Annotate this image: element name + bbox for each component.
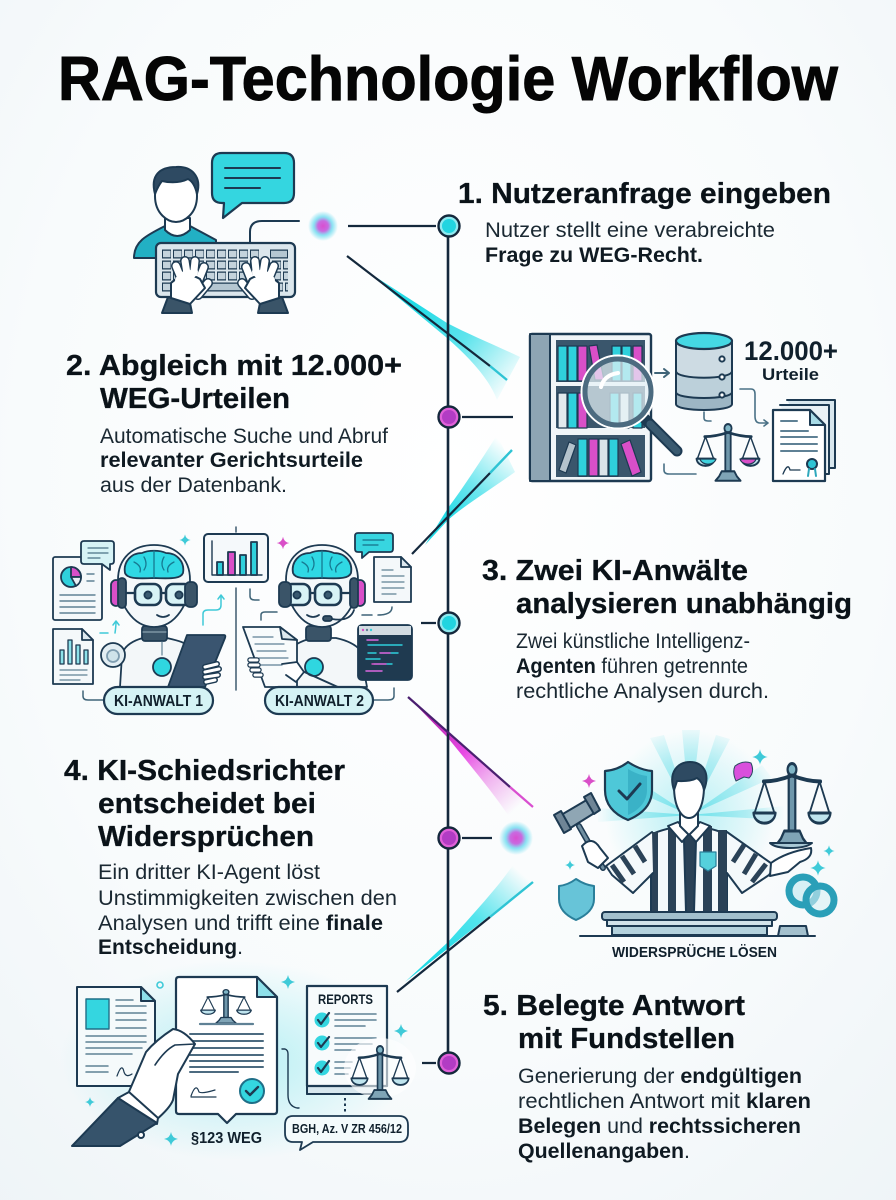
body 4 [98, 861, 397, 959]
divider [235, 527, 237, 690]
caption: WIDERSPRÜCHE LÖSEN [612, 944, 777, 961]
icon: left hand [162, 261, 208, 313]
haze [60, 960, 410, 1160]
body 5: Quellenangaben. [518, 1140, 690, 1163]
body 2: Automatische Suche und Abruf [100, 425, 388, 448]
body 4: Analysen und trifft eine finale [98, 912, 383, 935]
sparkles [565, 749, 835, 876]
step 1 text [458, 178, 831, 267]
citation label: BGH, Az. V ZR 456/12 [292, 1122, 402, 1136]
illustration: referee [554, 730, 835, 961]
step 5 text [483, 990, 811, 1163]
body 2: aus der Datenbank. [100, 474, 287, 497]
step 4 text [64, 755, 397, 959]
shield top [605, 762, 652, 820]
body 3 [516, 630, 769, 703]
body 5: Belegen und rechtssicheren [518, 1115, 801, 1138]
right hand [770, 848, 811, 876]
podium [580, 912, 815, 936]
body 3: Agenten führen getrennte [516, 655, 748, 678]
illustration: two AI lawyers [53, 527, 412, 714]
body 5: rechtlichen Antwort mit klaren [518, 1090, 811, 1113]
timeline with connectors [308, 211, 533, 1074]
shield bottom [559, 879, 594, 920]
hand and sleeve [72, 1029, 195, 1146]
bookcase [530, 334, 651, 481]
wedge: robots to referee [408, 697, 533, 818]
reports label: REPORTS [318, 991, 373, 1007]
reports sheet [307, 986, 387, 1094]
body 5 [518, 1065, 811, 1163]
left document [77, 987, 155, 1086]
bubble left [81, 541, 114, 570]
referee figure [606, 762, 775, 912]
citation label [285, 1116, 408, 1150]
label: KI-Anwalt 2: KI-ANWALT 2 [275, 693, 364, 710]
icon: person [134, 167, 216, 258]
glow dot: step 1 [308, 211, 338, 241]
node 4 [438, 828, 460, 848]
body 1: Nutzer stellt eine verabreichte [485, 219, 775, 242]
node 1 [438, 216, 460, 236]
title: RAG-Technologie Workflow [58, 45, 839, 114]
heading 5: 5. Belegte Antwort [483, 990, 746, 1022]
heading 4: entscheidet bei [98, 788, 316, 820]
body 1 [485, 219, 775, 267]
body 4: Unstimmigkeiten zwischen den [98, 887, 397, 910]
icon: speech bubble [212, 153, 294, 218]
body 5: Generierung der endgültigen [518, 1065, 802, 1088]
body 3: rechtliche Analysen durch. [516, 680, 769, 703]
wedge: referee to documents [405, 862, 533, 982]
step 3 text [482, 555, 852, 703]
terminal [358, 625, 412, 680]
heading 1: 1. Nutzeranfrage eingeben [458, 178, 831, 210]
heading 5 [483, 990, 746, 1055]
scales [754, 764, 830, 848]
label: KI-Anwalt 2 [265, 687, 373, 714]
heading 2: WEG-Urteilen [100, 383, 290, 415]
document with bars [53, 629, 93, 684]
glow dot: step 4 [499, 821, 533, 855]
heading 3 [482, 555, 852, 620]
heading 2: 2. Abgleich mit 12.000+ [66, 350, 402, 382]
heading 4: 4. KI-Schiedsrichter [64, 755, 345, 787]
counter sublabel: Urteile [762, 365, 819, 384]
chart card [204, 534, 268, 582]
counter label: 12.000+ [744, 336, 838, 366]
body 4: Entscheidung. [98, 936, 243, 959]
sparkles [85, 975, 408, 1146]
document right [374, 557, 411, 602]
magnifier [582, 356, 677, 451]
small scales [344, 1038, 416, 1099]
heading 5: mit Fundstellen [518, 1023, 735, 1055]
paragraph label: §123 WEG [191, 1130, 262, 1147]
heading 3: 3. Zwei KI-Anwälte [482, 555, 748, 587]
icon: library and database [530, 333, 838, 481]
rings [789, 877, 834, 914]
icon: user at keyboard [134, 153, 299, 313]
heading 4 [64, 755, 345, 853]
label: KI-Anwalt 1: KI-ANWALT 1 [114, 693, 203, 710]
body 1: Frage zu WEG-Recht. [485, 244, 703, 267]
documents [773, 400, 835, 481]
robot 1 [101, 545, 225, 687]
body 3: Zwei künstliche Intelligenz- [516, 630, 750, 653]
small connectors [664, 389, 768, 474]
burst rays [598, 730, 785, 900]
body 2: relevanter Gerichtsurteile [100, 449, 363, 472]
heading 4: Widersprüchen [98, 821, 314, 853]
database [676, 333, 732, 410]
heading 2 [66, 350, 402, 415]
accents [83, 589, 394, 700]
body 4: Ein dritter KI-Agent löst [98, 861, 320, 884]
scales [696, 424, 760, 481]
cable [250, 221, 299, 243]
node 3 [438, 612, 460, 634]
bubble right [355, 533, 393, 558]
step 2 text [66, 350, 402, 497]
wedge: library to robots [425, 435, 515, 545]
wedge: step 1 to library [365, 270, 520, 400]
icon: keyboard [156, 243, 295, 297]
icon: right hand [242, 261, 288, 313]
label: KI-Anwalt 1 [104, 687, 213, 714]
document with pie [53, 557, 102, 620]
node 5 [438, 1052, 460, 1074]
robot 2 [243, 545, 367, 688]
blob [734, 762, 753, 781]
illustration: documents [60, 960, 416, 1160]
heading 3: analysieren unabhängig [516, 588, 852, 620]
main document [176, 977, 277, 1123]
node 2 [438, 406, 460, 428]
body 2 [100, 425, 388, 497]
gavel [554, 793, 608, 868]
